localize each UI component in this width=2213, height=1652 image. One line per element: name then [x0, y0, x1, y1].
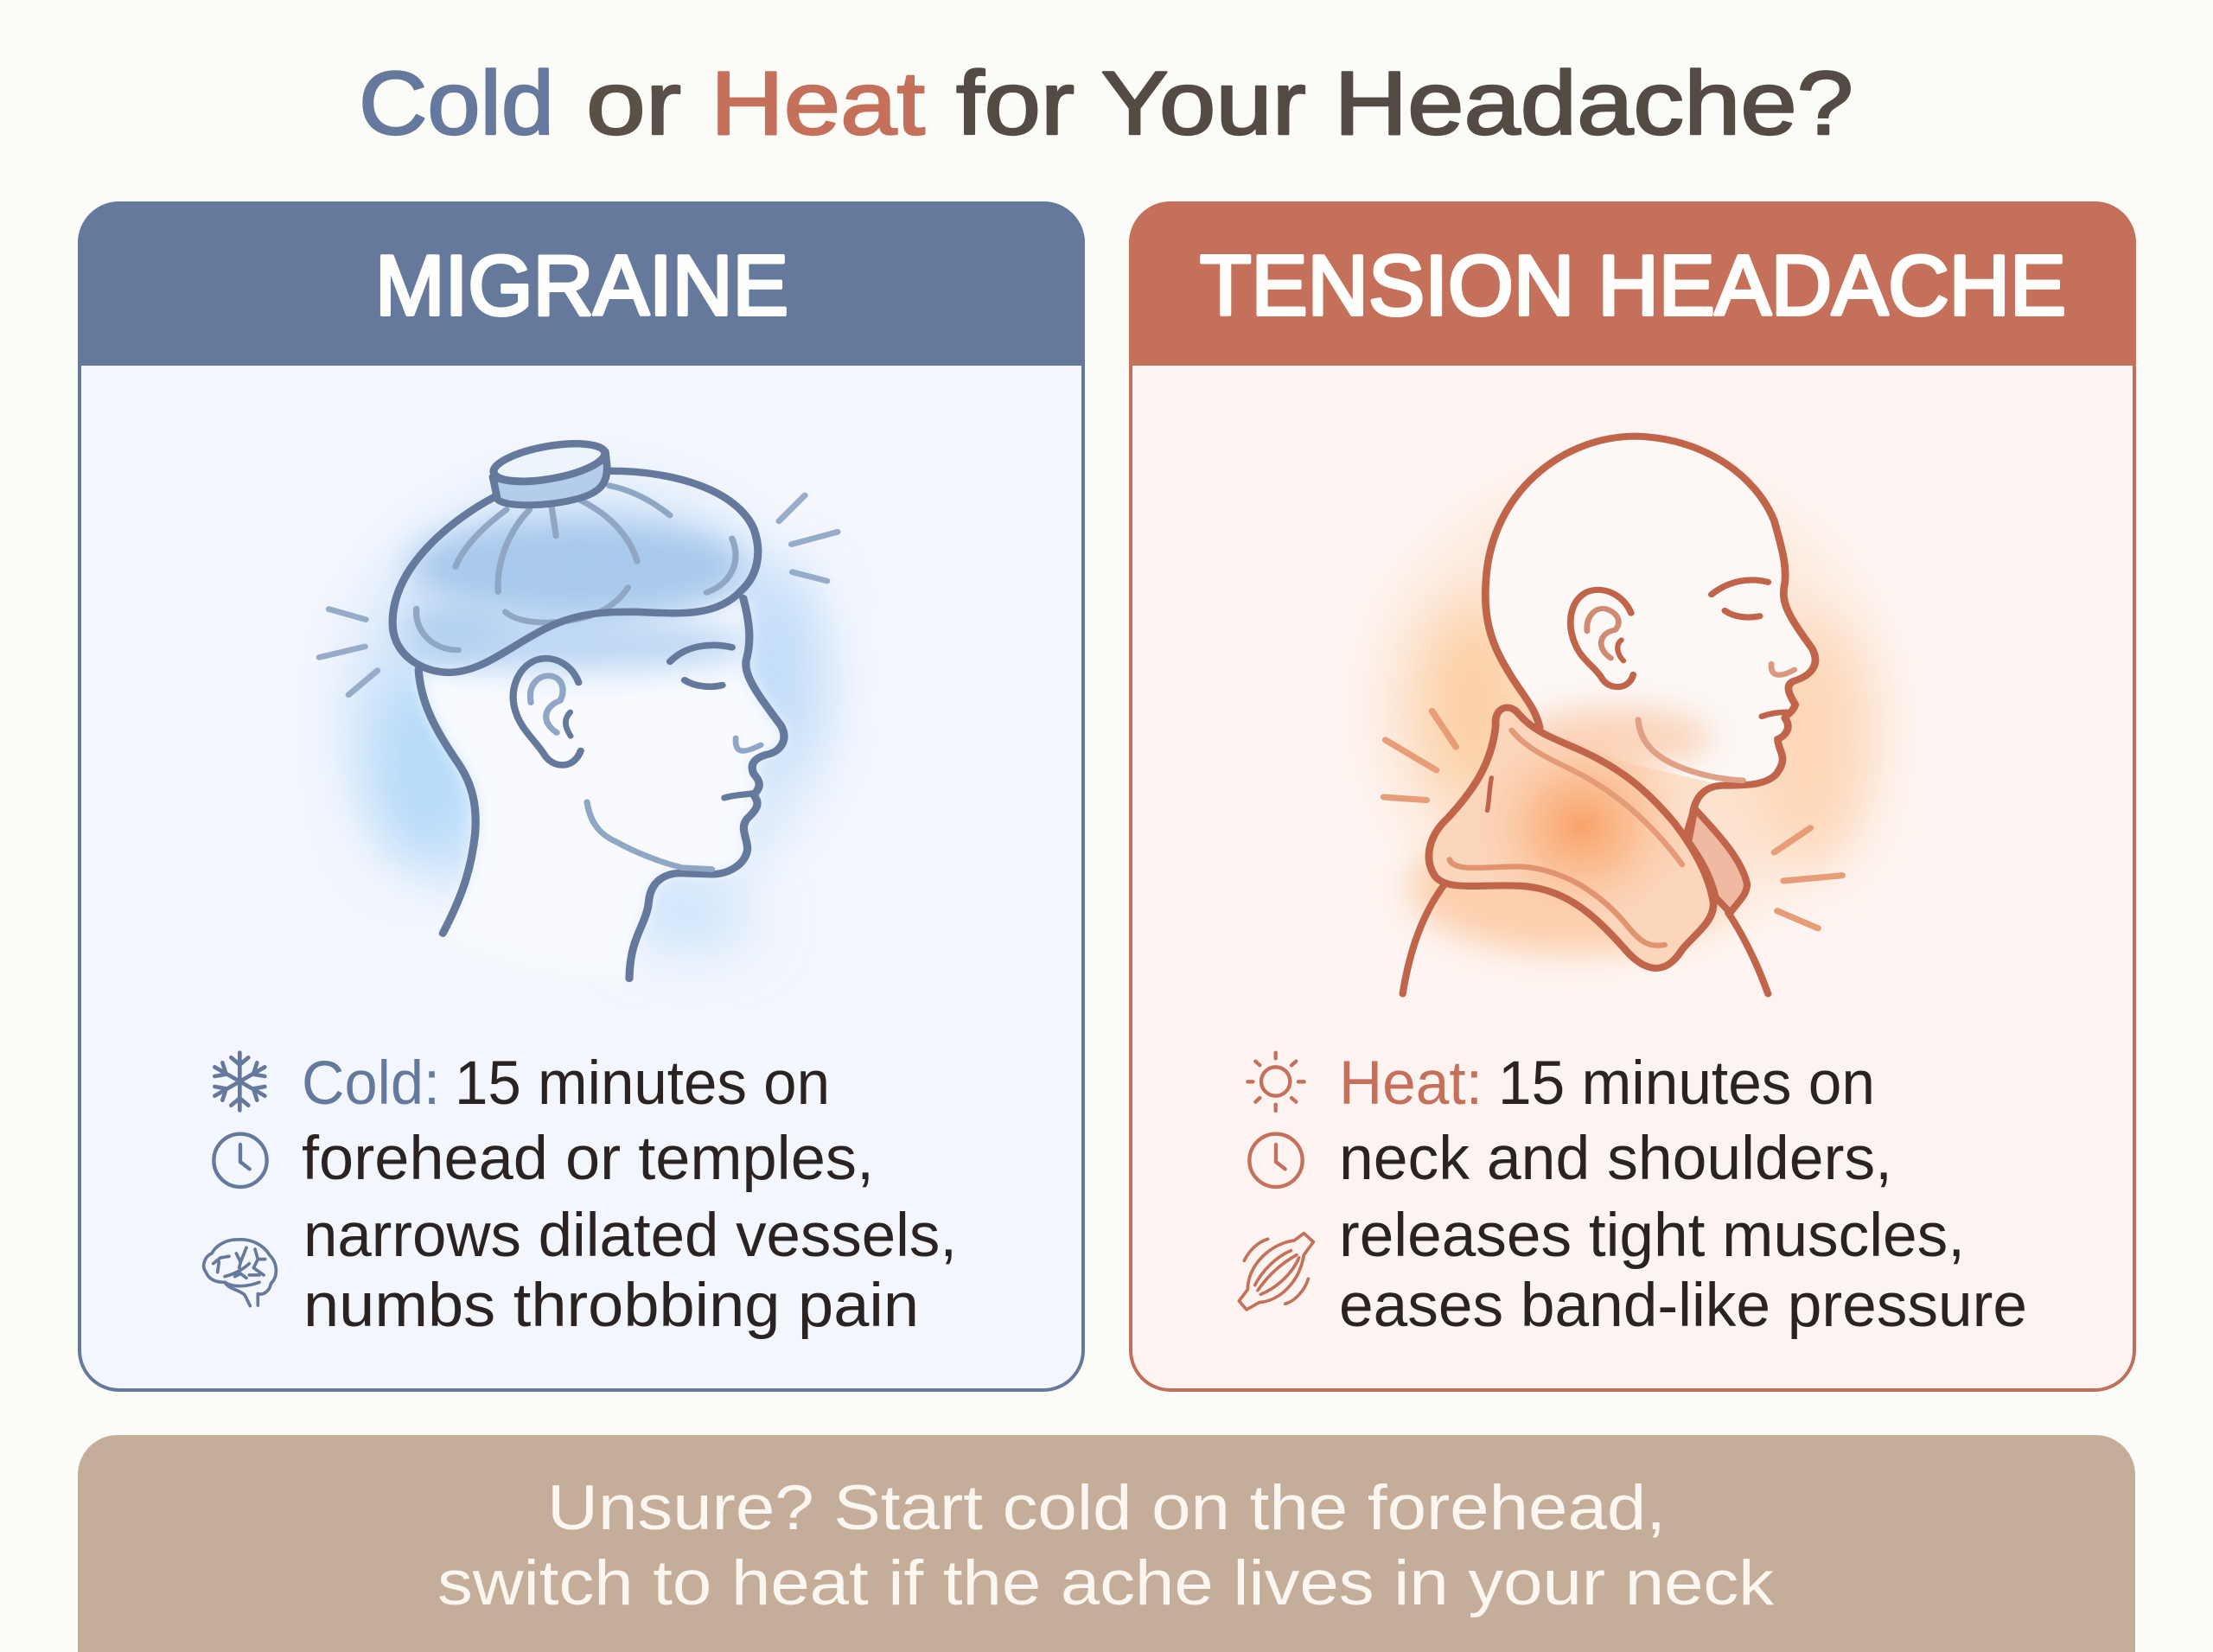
illustration: head with ice bag: [293, 432, 879, 979]
callout text: switch to heat if the ache lives in your neck: [437, 1548, 1775, 1618]
title: Heat: [711, 54, 925, 154]
migraine card body: [80, 203, 1083, 1390]
migraine heading: MIGRAINE: [375, 238, 788, 333]
tension header bar: [1129, 201, 2136, 366]
migraine header bar: [78, 201, 1085, 366]
migraine text: Cold:: [302, 1049, 440, 1118]
face fill: [1485, 437, 1815, 786]
head outline: [1485, 437, 1815, 836]
title: Cold: [359, 54, 554, 154]
panel: tension headache: [1129, 201, 2136, 1390]
icon: clock: [1249, 1134, 1303, 1187]
tension text: releases tight muscles,: [1339, 1202, 1965, 1270]
tension heading: TENSION HEADACHE: [1200, 238, 2066, 333]
callout text: [437, 1473, 1775, 1618]
title: for Your Headache?: [956, 54, 1853, 154]
face fill: [418, 598, 784, 979]
jaw warmth: [1519, 706, 1712, 769]
migraine text: narrows dilated vessels,: [303, 1202, 957, 1270]
ice bag: [392, 437, 758, 673]
panel: migraine: [78, 201, 1085, 1390]
tension text: 15 minutes on: [1498, 1049, 1875, 1118]
icon: clock: [214, 1134, 267, 1187]
shoulders: [1403, 886, 1768, 994]
heat pack: [1429, 708, 1747, 968]
pain rays: [1384, 711, 1842, 928]
icon: brain: [204, 1240, 276, 1306]
cold glow: [293, 432, 879, 973]
icon: muscle: [1239, 1234, 1313, 1310]
heat glow: [1335, 437, 1921, 977]
illustration: head with heat pack: [1335, 437, 1921, 994]
tension text: [1339, 1049, 2027, 1340]
tension text: eases band-like pressure: [1339, 1272, 2027, 1340]
callout text: Unsure? Start cold on the forehead,: [547, 1473, 1666, 1543]
tension text: neck and shoulders,: [1339, 1125, 1892, 1193]
tension card body: [1131, 203, 2134, 1390]
head outline: [418, 598, 784, 979]
migraine icons: [204, 1053, 276, 1306]
tension icons: [1239, 1053, 1313, 1310]
migraine text: [302, 1049, 957, 1340]
icon: snowflake: [214, 1053, 265, 1110]
title: [359, 54, 1853, 154]
pain rays: [319, 495, 838, 695]
callout: bottom advice banner: [78, 1435, 2135, 1652]
migraine text: numbs throbbing pain: [303, 1272, 919, 1340]
forehead chill: [402, 617, 754, 672]
migraine text: 15 minutes on: [455, 1049, 830, 1118]
icon: sun: [1247, 1053, 1304, 1111]
tension text: Heat:: [1339, 1049, 1483, 1118]
migraine text: forehead or temples,: [302, 1125, 874, 1193]
title: or: [586, 54, 681, 154]
